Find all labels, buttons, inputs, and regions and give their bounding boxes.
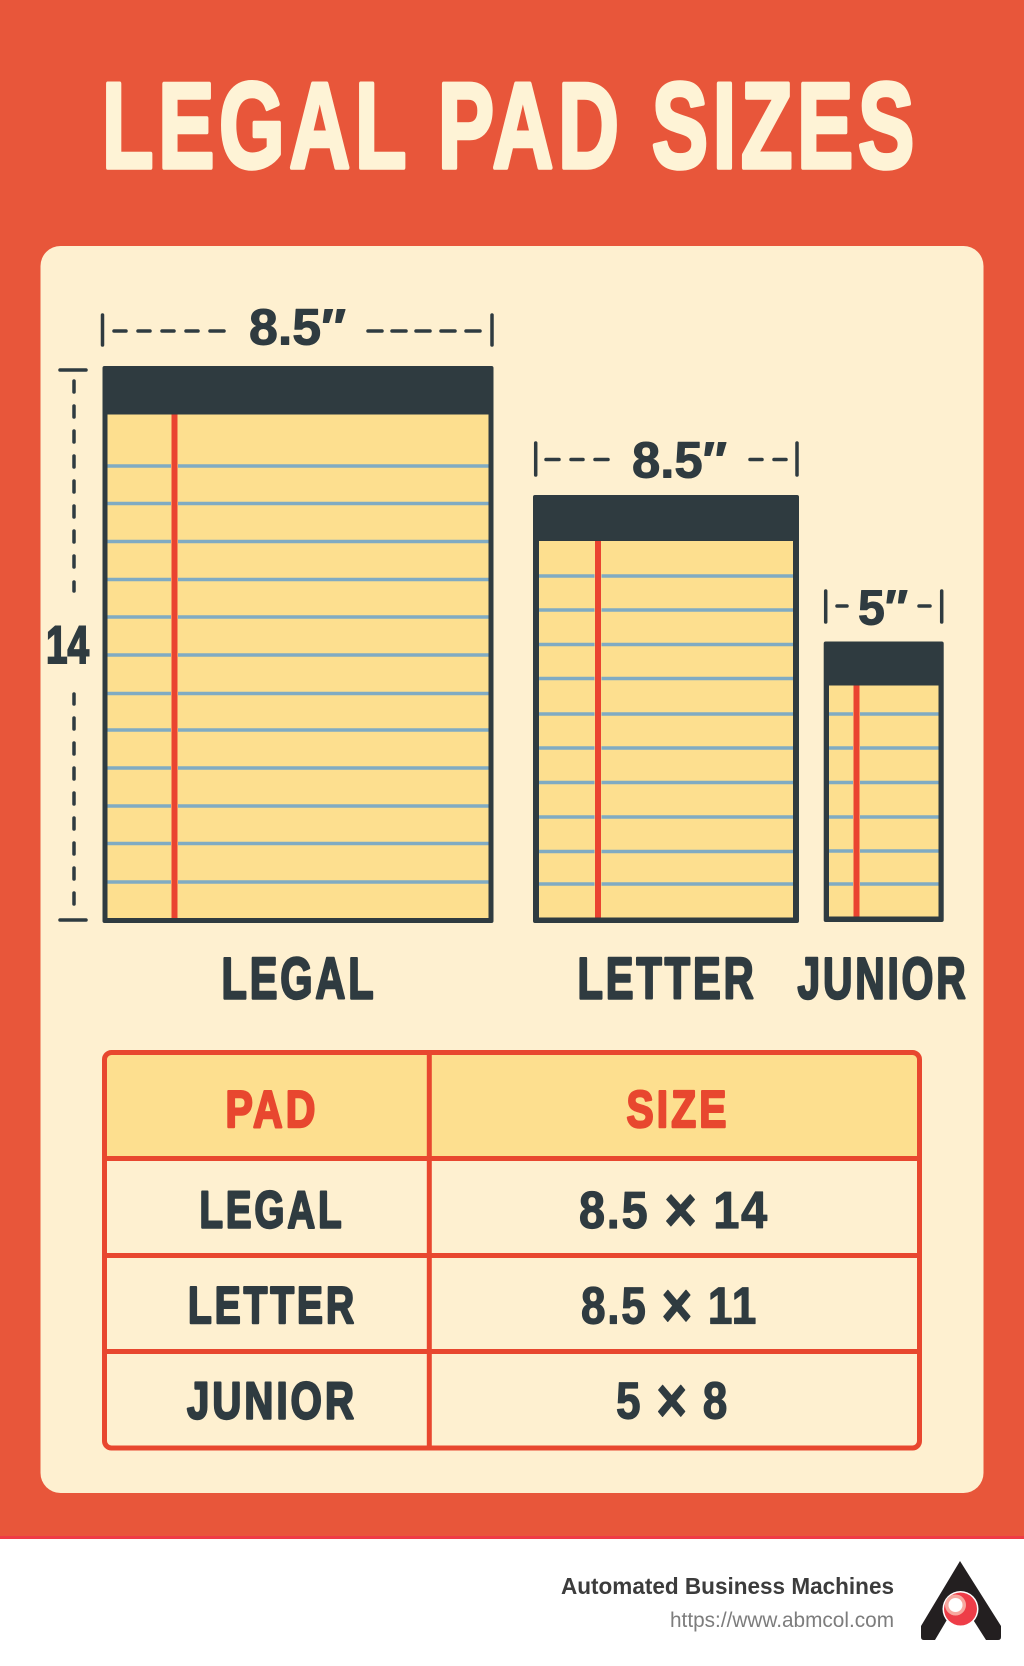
label: legal: LEGAL [222, 946, 376, 1012]
dimension: legal width: 8.5″ [249, 298, 346, 356]
table header fill [104, 1052, 920, 1158]
value: legal size: 14 [699, 1182, 769, 1240]
label: letter: LETTER [578, 946, 756, 1012]
value: legal size: × [664, 1176, 699, 1245]
junior pad [824, 642, 944, 922]
panel: main card [40, 246, 984, 1493]
value: junior size: 5 [616, 1372, 647, 1430]
value: letter size: 8.5 [581, 1278, 659, 1336]
table frame [104, 1052, 920, 1448]
value: junior size: × [656, 1366, 689, 1436]
company name: Automated Business Machines [561, 1573, 894, 1599]
footer [0, 1536, 1024, 1666]
value: letter size: × [661, 1272, 694, 1340]
company url: https://www.abmcol.com [670, 1609, 894, 1632]
table [104, 1052, 920, 1448]
dimension: junior width: 5″ [858, 582, 908, 636]
letter pad [533, 495, 799, 923]
value: junior size: 8 [689, 1372, 729, 1430]
icon: logo [921, 1561, 1001, 1640]
value: legal size: 8.5 [579, 1182, 657, 1240]
dimension: legal height: 14 [46, 616, 89, 675]
value: letter size: 11 [694, 1278, 758, 1336]
header: pad: PAD [226, 1081, 318, 1139]
row: junior: JUNIOR [187, 1372, 357, 1430]
header: size: SIZE [626, 1081, 730, 1139]
row: letter: LETTER [188, 1277, 357, 1335]
dimension: letter width: 8.5″ [632, 432, 727, 488]
dimension: junior width [826, 582, 942, 636]
row: legal: LEGAL [200, 1182, 344, 1240]
legal pad [102, 366, 494, 923]
